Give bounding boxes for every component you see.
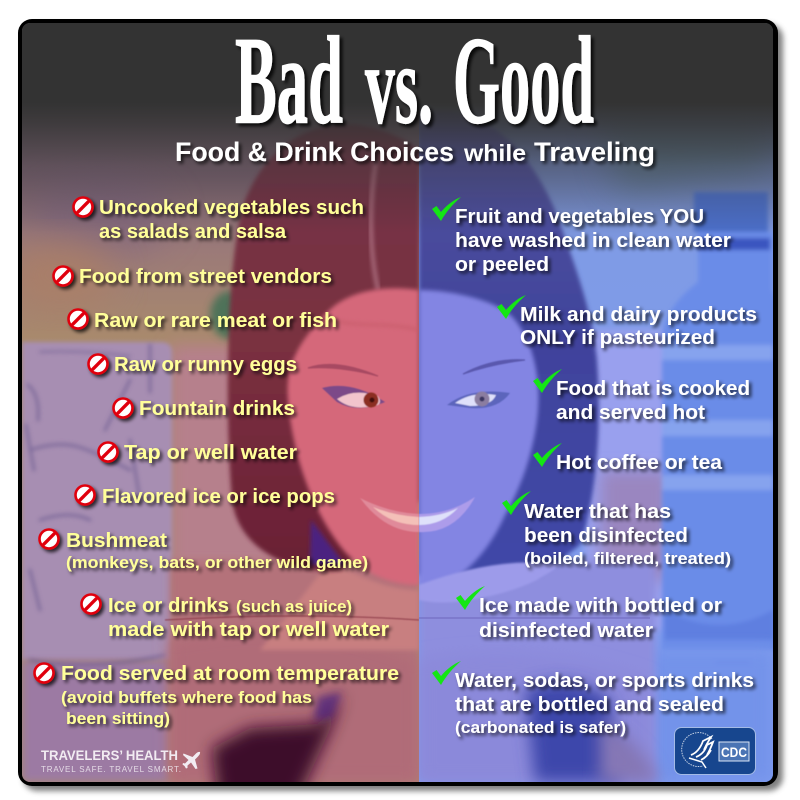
logo: Travelers' Health (41, 747, 200, 774)
bad item text: as salads and salsa (99, 221, 287, 243)
logo: Travelers' Health: TRAVEL SAFE. TRAVEL SMART. (41, 765, 181, 774)
right mouth (419, 497, 475, 532)
good item text: Water that has (524, 501, 671, 523)
panel: bad choices list (34, 197, 399, 728)
subtitle (175, 137, 655, 167)
bad item text: made with tap or well water (108, 619, 389, 641)
left eye (322, 386, 385, 408)
bad item text: Ice or drinks (108, 595, 229, 617)
left photo half, red tint (5, 23, 420, 800)
bad item text: Bushmeat (66, 530, 167, 552)
bad item text (61, 197, 399, 728)
good item text: ONLY if pasteurized (520, 327, 715, 349)
title: vs. (365, 24, 433, 148)
good item text: and served hot (556, 402, 705, 424)
good item text: Fruit and vegetables YOU (455, 206, 704, 228)
bad item text: Food from street vendors (79, 266, 332, 288)
good item text: Water, sodas, or sports drinks (455, 670, 754, 692)
logo: CDC (674, 728, 756, 774)
CDC wordmark: CDC (721, 744, 747, 760)
bad item text: (monkeys, bats, or other wild game) (66, 553, 368, 572)
bad item text: (such as juice) (236, 597, 352, 616)
logo: Travelers' Health: TRAVELERS’ HEALTH (41, 747, 178, 763)
bad item text: Food served at room temperature (61, 663, 399, 685)
right eye (447, 392, 510, 408)
icons: prohibition signs (34, 198, 132, 682)
bad item text: (avoid buffets where food has (61, 688, 312, 707)
bad item text: Flavored ice or ice pops (102, 486, 335, 508)
left mouth (360, 498, 419, 532)
bad item text: Uncooked vegetables such (99, 197, 364, 219)
subtitle: Traveling (534, 137, 655, 167)
title: Bad (235, 12, 343, 150)
left eyebrow (308, 364, 378, 376)
dark title band (22, 23, 773, 233)
good item text: that are bottled and sealed (455, 694, 724, 716)
good item text: have washed in clean water (455, 230, 731, 252)
right photo half, blue tint (419, 23, 785, 782)
water bottle (660, 190, 773, 650)
right eyebrow (463, 360, 525, 374)
good item text: been disinfected (524, 525, 688, 547)
good item text: disinfected water (479, 620, 653, 642)
bad item text: Raw or rare meat or fish (94, 310, 337, 332)
good item text: (carbonated is safer) (455, 718, 626, 737)
good item text: (boiled, filtered, treated) (524, 549, 731, 568)
panel: good choices list (432, 197, 757, 737)
icon: airplane (182, 752, 200, 769)
subtitle: while (463, 140, 526, 166)
icon: HHS eagle seal (682, 733, 713, 768)
subtitle: Food & Drink Choices (175, 137, 454, 167)
bad item text: Raw or runny eggs (114, 354, 297, 376)
good item text (455, 206, 757, 737)
bad item text: been sitting) (66, 709, 170, 728)
good item text: Food that is cooked (556, 378, 750, 400)
good item text: Hot coffee or tea (556, 452, 723, 474)
text: Good (453, 12, 594, 150)
bad item text: Tap or well water (124, 442, 297, 464)
good item text: Ice made with bottled or (479, 595, 722, 617)
good item text: or peeled (455, 254, 549, 276)
icons: green check marks (432, 197, 562, 685)
good item text: Milk and dairy products (520, 304, 757, 326)
bad item text: Fountain drinks (139, 398, 295, 420)
title (235, 12, 594, 150)
